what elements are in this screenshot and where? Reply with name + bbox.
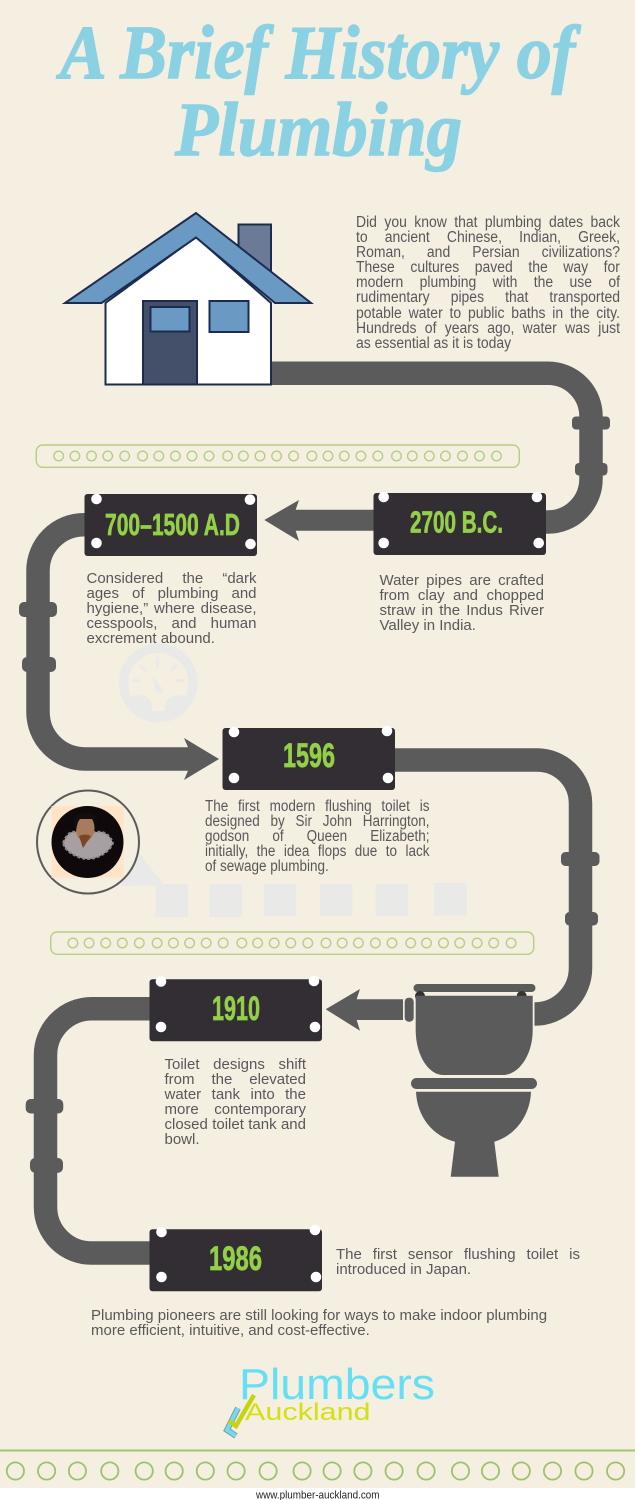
text: 700-1500 A.D: ages of plumbing and xyxy=(86,585,256,602)
portrait: Sir John Harrington xyxy=(37,790,139,894)
text: 700-1500 A.D: cesspools, and human xyxy=(86,615,256,632)
plate: 2700 B.C. xyxy=(374,492,546,555)
pipe: 1596 to toilet xyxy=(394,760,600,1014)
text: 1910: more contemporary xyxy=(164,1101,306,1118)
text: 1596: of sewage plumbing. xyxy=(205,858,329,875)
intro text: Hundreds of years ago, water was just xyxy=(356,320,619,337)
text: 1910 xyxy=(164,1056,306,1148)
plate: 1986: 1986 xyxy=(209,1240,262,1278)
dotted strip: upper xyxy=(36,445,519,467)
logo: Plumbers Auckland: Plumbers xyxy=(239,1360,435,1409)
plate: 700-1500 A.D xyxy=(84,494,257,556)
text: 2700 B.C.: Valley in India. xyxy=(380,617,476,634)
plate: 700-1500 A.D: 700–1500 A.D xyxy=(105,507,240,542)
intro text: Roman, and Persian civilizations? xyxy=(356,244,619,261)
arrow: 2700 B.C. to 700-1500 A.D xyxy=(264,500,375,541)
icon: house xyxy=(65,213,311,384)
text: 700-1500 A.D: hygiene,” where disease, xyxy=(86,600,256,617)
intro text: Did you know that plumbing dates back xyxy=(356,214,619,231)
intro text: as essential as it is today xyxy=(356,335,511,352)
text: 700-1500 A.D: excrement abound. xyxy=(86,630,215,647)
text: 1986: The first sensor flushing toilet is xyxy=(336,1246,580,1262)
text: 1596: godson of Queen Elizabeth; xyxy=(205,828,429,845)
closing text xyxy=(91,1306,547,1339)
pipe: 1910 to 1986 xyxy=(26,1009,151,1253)
title: Plumbing xyxy=(174,88,462,172)
text: 2700 B.C. xyxy=(380,572,544,634)
closing text: more efficient, intuitive, and cost-effective. xyxy=(91,1322,370,1339)
text: 1910: Toilet designs shift xyxy=(164,1056,306,1073)
plate: 1596 xyxy=(222,726,395,790)
logo: Plumbers Auckland: Auckland xyxy=(245,1399,370,1426)
text: 1596: The first modern flushing toilet is xyxy=(205,798,429,815)
plate: 1910 xyxy=(150,976,322,1041)
text: 1910: water tank into the xyxy=(164,1086,306,1103)
text: 1596: designed by Sir John Harrington, xyxy=(205,813,429,830)
intro text xyxy=(356,214,620,352)
plate: 2700 B.C.: 2700 B.C. xyxy=(410,505,503,540)
plate: 1910: 1910 xyxy=(212,990,260,1028)
arrow: toilet to 1910 xyxy=(326,989,414,1031)
text: 700-1500 A.D xyxy=(86,570,256,647)
text: 1596 xyxy=(205,798,430,875)
faded squares and pointer xyxy=(121,845,467,917)
text: 1986: introduced in Japan. xyxy=(336,1261,471,1278)
title: A Brief History of xyxy=(56,11,581,95)
logo: Plumbers Auckland xyxy=(227,1360,435,1436)
dotted strip: lower xyxy=(51,932,534,954)
intro text: potable water to public baths in the city. xyxy=(356,305,619,322)
closing text: Plumbing pioneers are still looking for ways to make indoor plumbing xyxy=(91,1306,547,1324)
intro text: modern plumbing with the use of xyxy=(356,274,619,291)
title xyxy=(56,11,581,172)
icon: toilet xyxy=(411,984,537,1177)
text: 1910: closed toilet tank and xyxy=(164,1116,306,1133)
pipe: 700-1500 A.D to 1596 with arrow xyxy=(19,525,219,780)
text: 1986 xyxy=(336,1246,580,1278)
intro text: rudimentary pipes that transported xyxy=(356,289,619,306)
intro text: to ancient Chinese, Indian, Greek, xyxy=(356,229,619,246)
text: 2700 B.C.: straw in the Indus River xyxy=(380,602,544,619)
plate: 1596: 1596 xyxy=(283,737,335,775)
text: 2700 B.C.: from clay and chopped xyxy=(380,587,544,604)
plate: 1986 xyxy=(150,1225,322,1291)
footer band of circles xyxy=(0,1450,635,1480)
icon: faded gauge xyxy=(124,648,193,722)
text: 1910: from the elevated xyxy=(164,1071,306,1088)
text: 700-1500 A.D: Considered the “dark xyxy=(86,570,256,587)
text: 2700 B.C.: Water pipes are crafted xyxy=(380,572,544,589)
pipe: house to 2700 B.C. xyxy=(272,373,610,522)
intro text: These cultures paved the way for xyxy=(356,259,619,276)
text: 1910: bowl. xyxy=(164,1131,200,1148)
text: 1596: initially, the idea flops due to lack xyxy=(205,843,429,860)
